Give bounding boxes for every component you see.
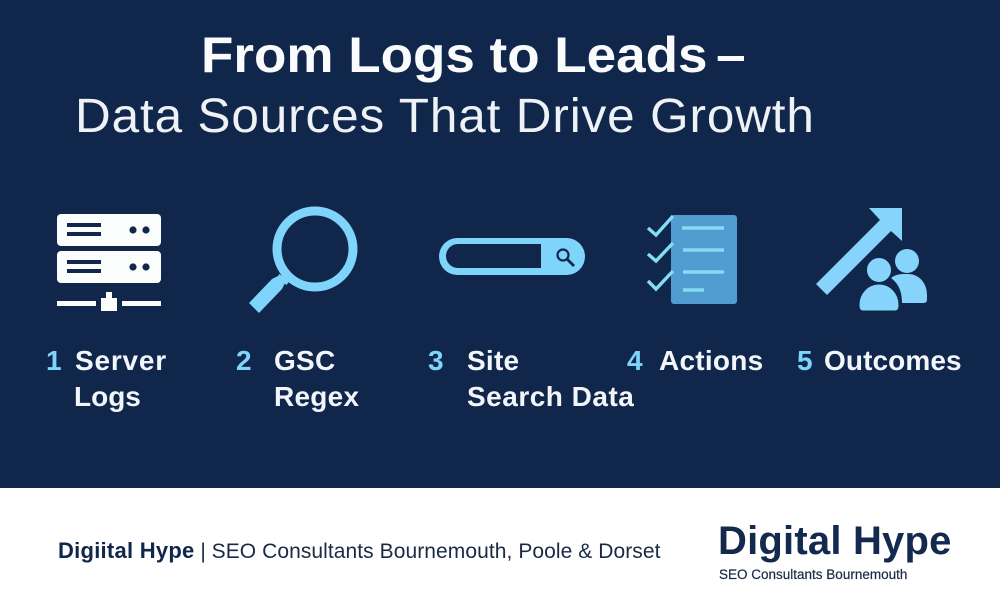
footer logo <box>718 519 952 582</box>
title line 1: From Logs to Leads <box>201 27 707 83</box>
footer logo: SEO Consultants Bournemouth <box>719 567 907 582</box>
label 1: server logs: 1 <box>46 345 62 376</box>
label 1: server logs <box>46 345 167 412</box>
title line 1: – <box>716 27 746 83</box>
label 2: GSC regex <box>236 345 359 412</box>
label 5: outcomes: 5 <box>797 345 813 376</box>
label 3: site search data: Site <box>467 345 519 376</box>
footer strapline: Digiital Hype | SEO Consultants Bournemouth, Poole & Dorset <box>58 538 661 563</box>
label 4: actions: Actions <box>659 345 763 376</box>
label 5: outcomes: Outcomes <box>824 345 962 376</box>
label 2: GSC regex: Regex <box>274 381 359 412</box>
label 3: site search data <box>428 345 634 412</box>
title line 2: Data Sources That Drive Growth <box>75 90 815 143</box>
label 2: GSC regex: 2 <box>236 345 252 376</box>
label 3: site search data: Search Data <box>467 381 634 412</box>
footer logo: Digital Hype <box>718 519 952 563</box>
label 4: actions: 4 <box>627 345 643 376</box>
label 1: server logs: Server <box>75 345 167 376</box>
label 1: server logs: Logs <box>74 381 141 412</box>
label 2: GSC regex: GSC <box>274 345 335 376</box>
label 3: site search data: 3 <box>428 345 444 376</box>
